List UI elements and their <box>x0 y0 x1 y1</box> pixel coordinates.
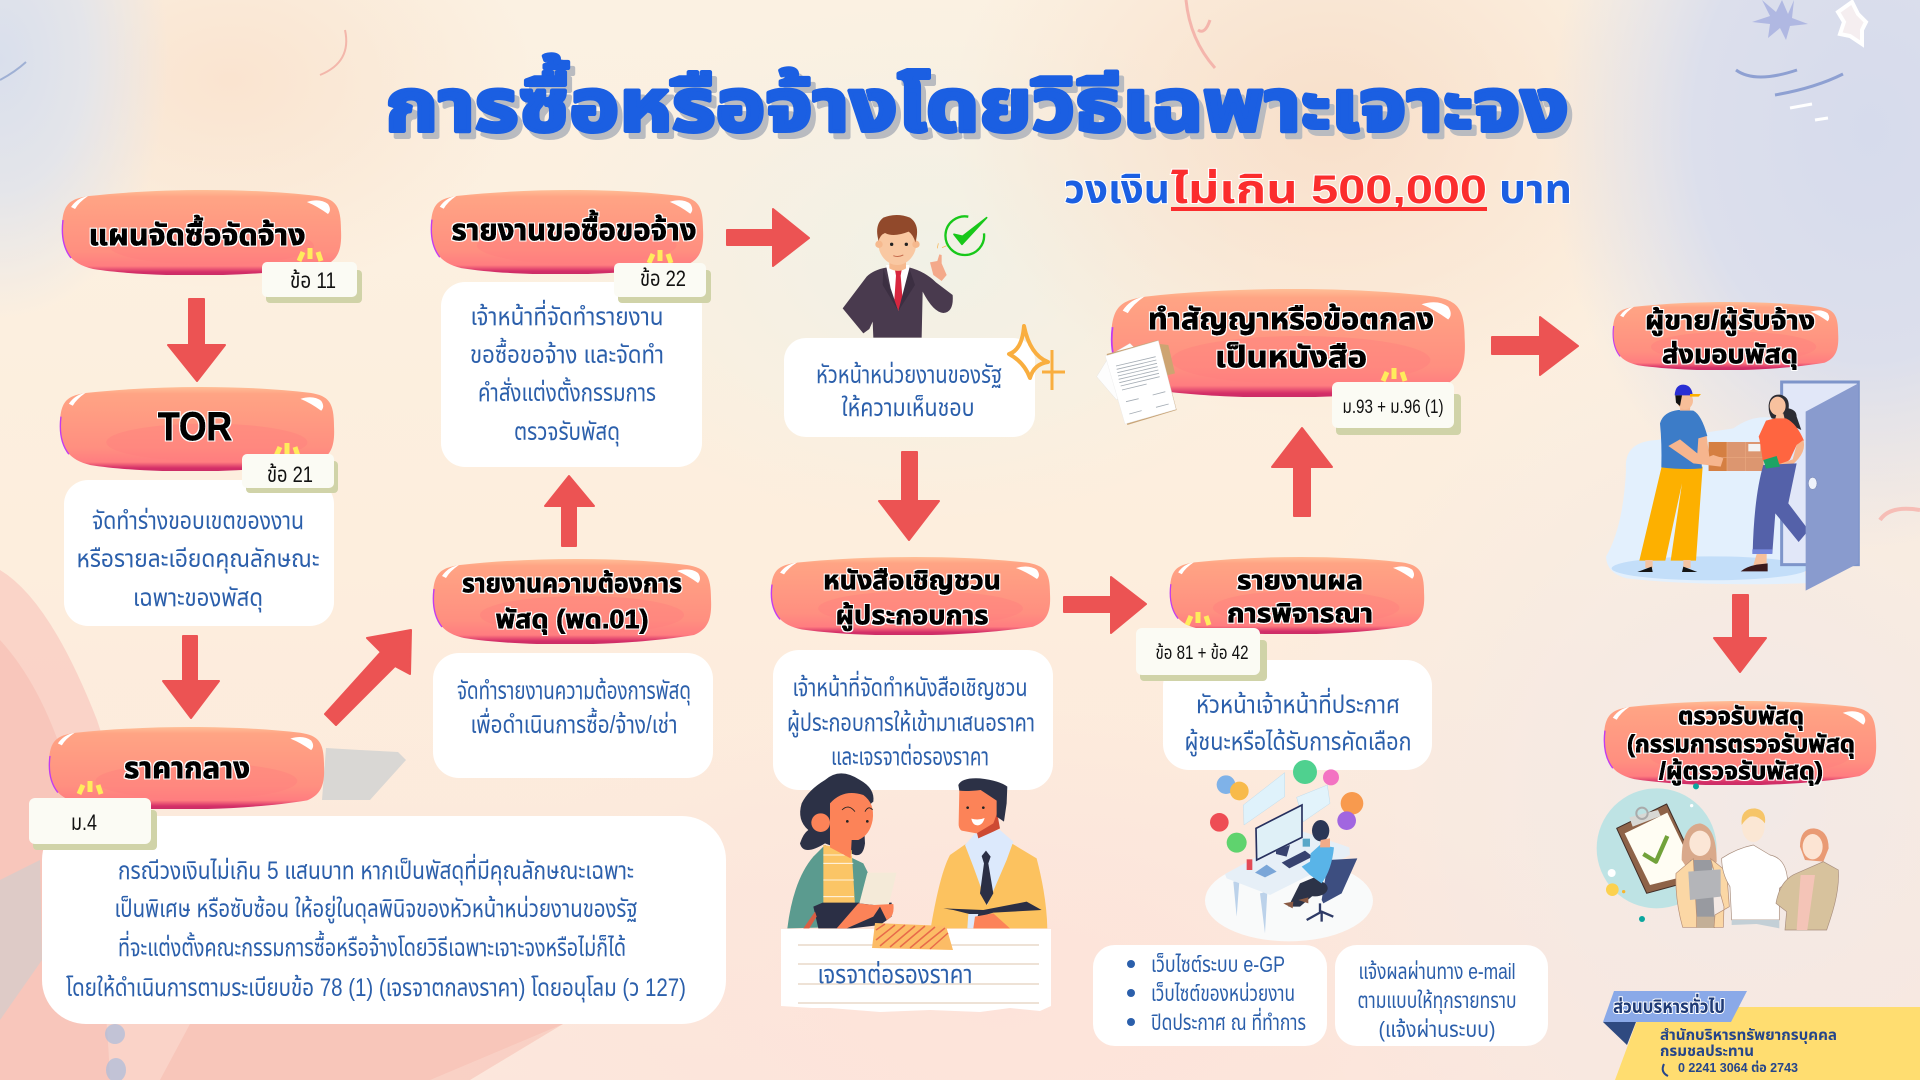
arrow: requirement to purchase report <box>545 476 594 546</box>
tag: clause 21: ข้อ 21 <box>267 462 313 487</box>
pill: requirement report: รายงานความต้องการ <box>462 568 682 598</box>
arrow: invitation to consideration <box>1064 577 1146 633</box>
white box: TOR description: จัดทำร่างขอบเขตของงาน <box>92 507 304 535</box>
pill: median price: ราคากลาง <box>124 753 250 785</box>
white box: e-mail notification: (แจ้งผ่านระบบ) <box>1378 1017 1496 1042</box>
arrow: TOR to median price <box>163 636 219 718</box>
tag: section 4: ม.4 <box>71 810 97 835</box>
pill: procurement plan <box>62 190 341 275</box>
pill: contract: เป็นหนังสือ <box>1215 342 1367 374</box>
pill: invitation letter: หนังสือเชิญชวน <box>823 565 1001 595</box>
white box: publication channels: เว็บไซต์ของหน่วยงาน <box>1151 981 1295 1006</box>
arrow: median price to requirement report <box>325 630 411 725</box>
white box: purchase report description: ตรวจรับพัสดุ <box>514 418 620 447</box>
tag: clause 81 + 42: ข้อ 81 + ข้อ 42 <box>1156 641 1248 664</box>
white box: TOR description: เฉพาะของพัสดุ <box>133 584 263 613</box>
tag: section 93 + 96 <box>1332 382 1461 435</box>
pill: consideration report: รายงานผล <box>1237 565 1363 595</box>
title: การซื้อหรือจ้างโดยวิธีเฉพาะเจาะจง <box>390 60 1574 153</box>
white box: winner announcement: หัวหน้าเจ้าหน้าที่ประกาศ <box>1196 687 1400 719</box>
white box: purchase report description: เจ้าหน้าที่จัดทำรายงาน <box>470 299 664 331</box>
white box: median price description <box>42 816 726 1024</box>
white box: winner announcement: ผู้ชนะหรือได้รับการคัดเลือก <box>1184 728 1412 757</box>
illustration: computer workstation <box>1205 760 1373 941</box>
white box: TOR description <box>64 480 334 626</box>
pill: seller delivers: ส่งมอบพัสดุ <box>1662 339 1798 370</box>
pill: invitation letter <box>771 557 1050 635</box>
icon: businessman with check <box>843 215 987 338</box>
tag: section 4 <box>29 798 157 850</box>
arrow: contract to delivery <box>1492 317 1578 375</box>
tag: clause 11 <box>262 262 362 303</box>
pill: inspection: (กรรมการตรวจรับพัสดุ <box>1627 731 1855 759</box>
pill: invitation letter: ผู้ประกอบการ <box>836 600 988 631</box>
pill: seller delivers <box>1613 302 1838 370</box>
white box: publication channels <box>1093 945 1327 1046</box>
subtitle: budget limit <box>1064 167 1572 212</box>
tag: section 93 + 96: ม.93 + ม.96 (1) <box>1342 397 1444 418</box>
tag: clause 22 <box>614 263 711 303</box>
icon: sparkle star <box>1009 326 1065 390</box>
pill: requirement report: พัสดุ (พด.01) <box>496 604 648 635</box>
white box: publication channels: ปิดประกาศ ณ ที่ทำการ <box>1151 1007 1306 1035</box>
white box: e-mail notification: แจ้งผลผ่านทาง e-mail <box>1358 959 1516 984</box>
arrow: plan to TOR <box>168 299 225 381</box>
pill: inspection: /ผู้ตรวจรับพัสดุ) <box>1659 757 1823 786</box>
arrow: consideration to contract <box>1272 428 1332 516</box>
illustration: negotiating couple <box>787 773 1047 928</box>
white box: winner announcement <box>1163 660 1432 770</box>
white box: head approval <box>784 338 1035 437</box>
subtitle: budget limit: วงเงิน <box>1064 168 1170 212</box>
white box: e-mail notification: ตามแบบให้ทุกรายทราบ <box>1358 988 1516 1014</box>
tag: clause 11: ข้อ 11 <box>290 268 336 293</box>
footer: department contact <box>1603 991 1920 1080</box>
white box: publication channels: เว็บไซต์ระบบ e-GP <box>1151 952 1285 977</box>
white box: invitation description <box>773 650 1053 790</box>
pill: consideration report <box>1170 557 1424 634</box>
white box: e-mail notification <box>1335 945 1548 1046</box>
arrow: approval to invitation <box>879 452 939 540</box>
panel: negotiation note: เจรจาต่อรองราคา <box>818 959 972 989</box>
pill: TOR <box>60 387 334 471</box>
white box: invitation description: ผู้ประกอบการให้เข้ามาเสนอราคา <box>787 709 1035 738</box>
illustration: inspection team <box>1597 783 1839 930</box>
illustration: delivery scene <box>1606 382 1858 591</box>
white box: purchase report description: คำสั่งแต่งตั้งกรรมการ <box>478 376 656 407</box>
title: การซื้อหรือจ้างโดยวิธีเฉพาะเจาะจง <box>386 54 1568 147</box>
pill: contract: ทำสัญญาหรือข้อตกลง <box>1148 304 1434 336</box>
tag: clause 22: ข้อ 22 <box>640 266 686 291</box>
subtitle: budget limit: ไม่เกิน 500,000 <box>1171 167 1487 212</box>
pill: requirement report <box>433 559 711 644</box>
tag: clause 21 <box>242 454 338 493</box>
pill: median price <box>49 727 324 809</box>
footer: department contact: กรมชลประทาน <box>1660 1043 1754 1060</box>
white box: median price description: ที่จะแต่งตั้งคณะกรรมการซื้อหรือจ้างโดยวิธีเฉพาะเจาะจงหรือไม่ก็ได้ <box>118 930 626 962</box>
white box: invitation description: เจ้าหน้าที่จัดทำหนังสือเชิญชวน <box>792 670 1028 702</box>
arrow: delivery to inspection <box>1714 595 1766 672</box>
white box: requirement report description <box>433 653 713 778</box>
pill: inspection <box>1604 701 1876 786</box>
tag: clause 81 + 42 <box>1136 628 1267 681</box>
white box: invitation description: และเจรจาต่อรองราคา <box>831 743 989 771</box>
white box: median price description: โดยให้ดำเนินการตามระเบียบข้อ 78 (1) (เจรจาตกลงราคา) โดยอนุโลม (ว 127) <box>66 974 686 1003</box>
white box: median price description: เป็นพิเศษ หรือซับซ้อน ให้อยู่ในดุลพินิจของหัวหน้าหน่วยงานของรัฐ <box>114 895 638 924</box>
icon: contract document <box>1097 340 1177 425</box>
white box: purchase report description <box>441 282 702 467</box>
subtitle: budget limit: บาท <box>1499 168 1572 212</box>
pill: seller delivers: ผู้ขาย/ผู้รับจ้าง <box>1645 305 1815 336</box>
white box: TOR description: หรือรายละเอียดคุณลักษณะ <box>76 545 320 574</box>
pill: purchase report <box>431 190 703 274</box>
footer: department contact: สำนักบริหารทรัพยากรบุคคล <box>1660 1027 1837 1044</box>
arrow: purchase report to approval <box>727 209 809 266</box>
pill: TOR: TOR <box>158 405 232 449</box>
pill: consideration report: การพิจารณา <box>1227 598 1373 628</box>
white box: purchase report description: ขอซื้อขอจ้าง และจัดทำ <box>470 337 664 369</box>
panel: negotiation note <box>781 923 1051 1012</box>
white box: median price description: กรณีวงเงินไม่เกิน 5 แสนบาท หากเป็นพัสดุที่มีคุณลักษณะเฉพาะ <box>118 853 634 886</box>
pill: inspection: ตรวจรับพัสดุ <box>1678 703 1804 731</box>
white box: requirement report description: จัดทำรายงานความต้องการพัสดุ <box>457 677 691 706</box>
white box: head approval: หัวหน้าหน่วยงานของรัฐ <box>816 361 1002 389</box>
footer: department contact: ส่วนบริหารทั่วไป <box>1613 994 1725 1018</box>
pill: purchase report: รายงานขอซื้อขอจ้าง <box>452 209 696 247</box>
white box: requirement report description: เพื่อดำเนินการซื้อ/จ้าง/เช่า <box>470 707 678 739</box>
footer: department contact: 0 2241 3064 ต่อ 2743 <box>1678 1060 1798 1075</box>
white box: head approval: ให้ความเห็นชอบ <box>842 394 974 422</box>
pill: contract <box>1111 289 1465 398</box>
pill: procurement plan: แผนจัดซื้อจัดจ้าง <box>88 214 306 252</box>
